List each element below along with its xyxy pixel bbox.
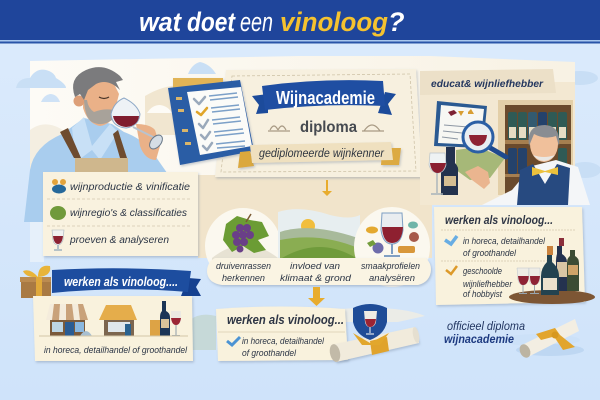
text: grapes label: druivenrassen: [216, 261, 271, 272]
panel: topic labels pill: [207, 258, 431, 285]
icon: small vineyard sketches: [268, 125, 384, 131]
outer clouds: [500, 71, 600, 346]
title: wat: [139, 7, 182, 37]
panel: paper backdrop: [30, 56, 575, 205]
icon: orange check: [446, 266, 457, 274]
text: right career first: [463, 236, 546, 258]
illustration: winemaker tasting wine: [24, 67, 172, 222]
text: right career second: wijnliefhebber: [463, 279, 513, 289]
text: right career second: geschoolde: [463, 266, 502, 276]
illustration: grape circle: [205, 208, 281, 284]
paper band behind career centre: [340, 308, 425, 322]
text: climate label: [280, 261, 352, 284]
icon: wine tasting glass: [52, 230, 64, 250]
ribbon: werken als vinoloog left: [52, 268, 201, 296]
text: shops caption: in horeca, detailhandel of groothandel: [44, 345, 188, 356]
icon: boxes bottle and glass: [150, 301, 181, 336]
text: climate label: invloed van: [290, 261, 340, 272]
icon: wine glass in hand: [111, 98, 165, 151]
ribbon: gediplomeerde wijnkenner: gediplomeerde wijnkenner: [259, 148, 385, 160]
text: grapes label: [216, 261, 271, 284]
wine shelf: [498, 100, 573, 195]
ribbon: gediplomeerde wijnkenner: [250, 142, 401, 165]
arrow: down to career panel: [308, 287, 325, 306]
text: climate label: klimaat & grond: [280, 273, 352, 284]
panel: diploma: [215, 69, 422, 177]
icon: vineyard map: [456, 147, 505, 180]
icon: chart screen: [434, 101, 487, 148]
ribbon: werken als vinoloog left: werken als vinoloog....: [64, 274, 178, 289]
pale left strip: [30, 200, 44, 262]
panel: skills list: [43, 172, 198, 256]
text: production: wijnproductie & vinificatie: [70, 181, 190, 193]
panel: career right: [434, 207, 585, 305]
icon: shop striped: [46, 304, 92, 336]
illustration: flavour profile circle: [354, 207, 430, 287]
faint landscape strip: [190, 315, 216, 350]
ribbon: Wijnacademie: Wijnacademie: [276, 88, 375, 108]
panel: educator section: [420, 69, 575, 205]
heading: werken als vinoloog right: werken als vinoloog...: [445, 215, 553, 227]
panel: career shops: [33, 296, 193, 361]
icon: scroll with shield: [328, 304, 421, 363]
icon: check mark: [227, 337, 240, 345]
icon: production: [52, 179, 66, 194]
icon: shop yellow: [99, 305, 137, 336]
text: flavour label: smaakprofielen: [361, 261, 420, 272]
text: grapes label: herkennen: [222, 273, 265, 284]
heading: werken als vinoloog centre: werken als vinoloog...: [227, 312, 344, 327]
illustration: bottles on wooden tray: [509, 238, 595, 304]
beige centre backdrop: [198, 175, 432, 258]
ribbon: Wijnacademie: [252, 80, 396, 115]
header band: [0, 0, 600, 44]
panel: career centre: [216, 306, 348, 361]
heading: educator and wine lover: educat& wijnliefhebber: [431, 78, 544, 90]
text: centre career list: [242, 336, 325, 358]
inner clouds: [16, 62, 216, 113]
icon: regions: [50, 206, 66, 220]
text: diploma: diploma: [300, 119, 357, 136]
text: tasting: proeven & analyseren: [69, 234, 169, 246]
icon: notebook with checklist: [168, 78, 254, 168]
icon: gift box: [20, 266, 51, 298]
icon: rolled diploma: [516, 319, 584, 359]
icon: blue check: [445, 236, 457, 244]
illustration: sommelier: [465, 125, 590, 205]
text: official diploma: officieel diploma: [447, 319, 525, 333]
text: right career second: [463, 266, 513, 299]
text: centre career list: of groothandel: [242, 348, 297, 358]
text: official diploma: [444, 319, 525, 346]
title: ?: [388, 7, 404, 37]
title: vinoloog: [280, 7, 388, 37]
text: regions: wijnregio's & classificaties: [70, 207, 188, 219]
text: flavour label: [361, 261, 420, 284]
text: right career first: in horeca, detailhandel: [463, 236, 546, 246]
icon: wine bottle and glass: [429, 147, 458, 195]
title: een: [240, 7, 273, 37]
text: right career second: of hobbyist: [463, 289, 502, 299]
title: [139, 7, 404, 37]
title: doet: [187, 7, 236, 37]
text: official diploma: wijnacademie: [444, 332, 514, 346]
arrow: down from diploma: [322, 180, 332, 196]
text: flavour label: analysëren: [369, 273, 415, 284]
text: right career first: of groothandel: [463, 248, 517, 258]
icon: magnifying glass: [463, 122, 506, 157]
illustration: landscape climate and soil: [278, 209, 360, 258]
text: centre career list: in horeca, detailhandel: [242, 336, 325, 346]
